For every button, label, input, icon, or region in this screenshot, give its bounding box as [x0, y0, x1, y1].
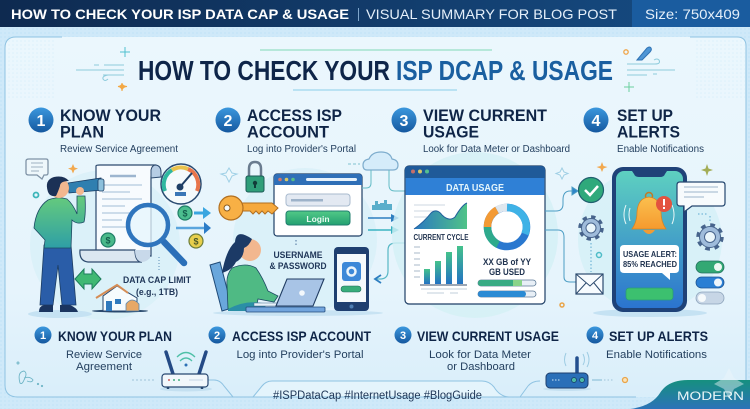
label: data cap limit: (e.g., 1TB): [136, 287, 178, 298]
icon: check circle: [578, 178, 604, 202]
bottom step 4: Enable Notifications: [606, 349, 708, 361]
main title: ISP DCAP & USAGE: [396, 55, 613, 86]
icon: padlock: [246, 162, 264, 192]
panel: alerts illustration: [545, 162, 725, 317]
label: gb used: [483, 257, 532, 278]
chart: area chart: CURRENT CYCLE: [414, 233, 469, 242]
bottom step 3: [394, 326, 559, 373]
bottom step 1: [34, 326, 172, 373]
icon: contract document: [80, 165, 161, 262]
label: username and password: [270, 240, 327, 272]
icon: sparkle: [221, 168, 237, 182]
icon: speed gauge: [161, 164, 201, 204]
chart: usage donut: [487, 207, 526, 246]
icon: sparkle: [556, 168, 568, 179]
icon: doodle bottom left: [17, 362, 43, 387]
icon: smartphone with alert: [612, 167, 687, 312]
callout: usage alert: USAGE ALERT:: [623, 249, 677, 259]
bottom step 3: or Dashboard: [447, 361, 515, 373]
logo: modern badge: MODERN: [677, 391, 744, 403]
bottom step 3: VIEW CURRENT USAGE: [417, 328, 559, 344]
hashtags: #ISPDataCap #InternetUsage #BlogGuide: [273, 390, 482, 402]
icon: smartphone with gear: [334, 247, 369, 311]
step 4 heading: Enable Notifications: [617, 144, 704, 155]
bottom step 1: 1: [40, 330, 46, 342]
step 2 heading: ACCOUNT: [247, 124, 329, 142]
main title: [138, 50, 613, 90]
step 4 heading: ALERTS: [617, 124, 680, 142]
label: username and password: & PASSWORD: [270, 261, 327, 272]
icon: magnifying glass: [128, 205, 184, 263]
arrows: to dashboard: [368, 214, 399, 234]
label: data cap limit: [123, 257, 191, 298]
icon: toggle switches: [696, 261, 724, 304]
icon: gold key: [219, 196, 278, 220]
icon: woman at laptop: [210, 234, 278, 311]
bottom step 3: Look for Data Meter: [429, 349, 531, 361]
icon: bell: [624, 192, 674, 234]
label: data cap limit: DATA CAP LIMIT: [123, 275, 191, 286]
bottom step 2: Log into Provider's Portal: [236, 349, 364, 361]
label: gb used: GB USED: [489, 267, 525, 278]
icon: coins and arrows: $: [182, 208, 188, 218]
step 1 heading: 1: [37, 113, 46, 130]
logo: modern badge: [630, 368, 750, 409]
icon: chat bubble: [26, 159, 48, 179]
bottom step 3: 3: [400, 330, 406, 342]
bottom step 1: KNOW YOUR PLAN: [58, 328, 172, 344]
top banner: HOW TO CHECK YOUR ISP DATA CAP & USAGE: [11, 6, 349, 22]
step 1 heading: KNOW YOUR: [60, 107, 161, 125]
bottom step 4: 4: [592, 330, 599, 342]
label: username and password: USERNAME: [274, 250, 322, 261]
step 2 heading: ACCESS ISP: [247, 107, 342, 125]
callout: usage alert: 85% REACHED: [623, 259, 677, 269]
step 3 heading: USAGE: [423, 124, 479, 142]
icon: left gear: [580, 217, 602, 239]
icon: coins and arrows: $: [193, 236, 199, 246]
icons: sparkles and rings: [560, 162, 713, 307]
icon: house: [92, 285, 148, 312]
arrow: back to phone: [375, 243, 405, 283]
icon: envelope: [576, 274, 603, 294]
bottom step 1: Review Service: [66, 349, 142, 361]
bottom step 4: [586, 326, 708, 361]
icon: green double arrow: [75, 269, 101, 289]
decoration: title left wind lines: [76, 47, 130, 91]
step 2 heading: [216, 107, 356, 155]
decoration: title right wind lines and pen: [624, 47, 675, 92]
bottom step 4: SET UP ALERTS: [609, 328, 708, 344]
icon: wifi router left: [132, 352, 212, 392]
icon: person with spyglass: [34, 176, 104, 312]
icon: chat bubble: [677, 182, 725, 212]
step 3 heading: Look for Data Meter or Dashboard: [423, 144, 570, 155]
dashboard window: [405, 166, 545, 304]
icon: contract document: $: [105, 236, 111, 246]
dashboard window: DATA USAGE: [446, 182, 504, 194]
label: gb used: XX GB of YY: [483, 257, 532, 268]
top banner: VISUAL SUMMARY FOR BLOG POST: [366, 6, 617, 22]
top banner: Size: 750x409: [645, 6, 740, 22]
step 3 heading: [392, 107, 570, 155]
icon: login window: [274, 174, 362, 236]
step 1 heading: [28, 107, 178, 155]
step 3 heading: 3: [400, 113, 409, 130]
step 1 heading: PLAN: [60, 124, 104, 142]
step 2 heading: 2: [224, 113, 233, 130]
icon: router right: [543, 352, 628, 391]
icon: laptop: [246, 279, 325, 312]
bottom step 2: ACCESS ISP ACCOUNT: [232, 328, 371, 344]
panel: access account illustration: [210, 152, 405, 316]
step 4 heading: SET UP: [617, 107, 673, 125]
main title: HOW TO CHECK YOUR: [138, 55, 390, 86]
icon: sparkle and ring: [34, 164, 78, 198]
step 2 heading: Log into Provider's Portal: [247, 144, 356, 155]
step 4 heading: 4: [592, 113, 601, 130]
connectors: [545, 187, 591, 282]
step 3 heading: VIEW CURRENT: [423, 107, 547, 125]
chart: area chart: [414, 203, 469, 242]
icon: data bars: [372, 200, 392, 210]
step 1 heading: Review Service Agreement: [60, 144, 178, 155]
callout: usage alert: [620, 245, 679, 280]
bottom step 1: Agreement: [76, 361, 132, 373]
panel: view usage illustration: [392, 152, 568, 318]
panel: know your plan illustration: [26, 159, 211, 320]
icon: cloud: [348, 152, 405, 191]
icon: coins and arrows: [176, 206, 211, 248]
top banner: [0, 0, 750, 27]
progress bars: [478, 280, 536, 297]
step 4 heading: [584, 107, 704, 155]
bottom step 2: [208, 326, 371, 361]
icon: right gear: [698, 225, 722, 249]
icon: login window: Login: [306, 214, 330, 224]
chart: bar chart: [414, 246, 467, 293]
bottom step 2: 2: [214, 330, 220, 342]
